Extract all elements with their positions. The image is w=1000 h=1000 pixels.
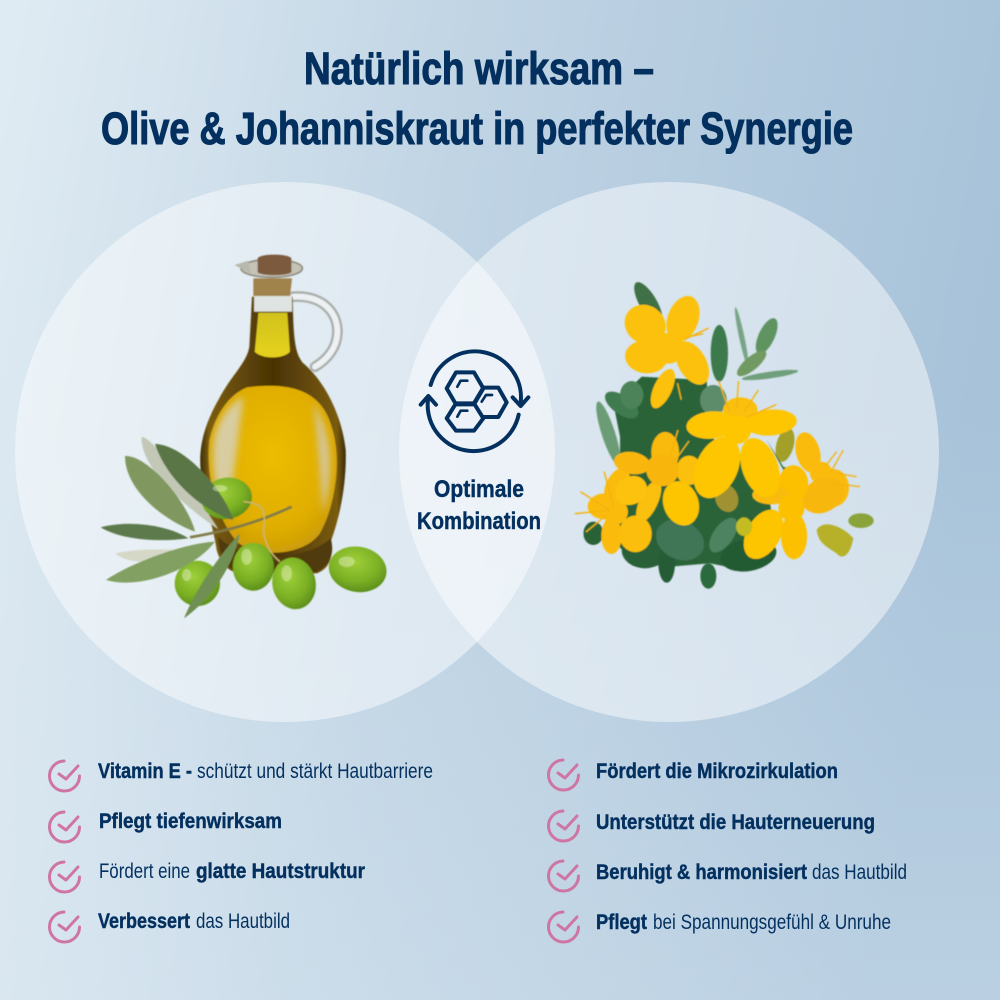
main oil [209,386,337,553]
item: glatte Hautstruktur [50,859,366,892]
flower 3 [610,430,705,531]
flower 4 [575,463,652,554]
rim [241,259,302,277]
item: Pflegt: bei Spannungsgefühl & Unruhe [653,910,891,934]
oil highlights [213,397,330,513]
item: Beruhigt [549,860,907,891]
item: Pflegt [549,910,891,942]
flower 2 [684,381,798,506]
item: Hauterneuerung [549,810,875,841]
panel: overlapping circles [15,182,939,722]
olives front [175,561,220,606]
item: Verbessert: Verbessert [98,909,190,933]
title: Natürlich wirksam – [304,43,654,94]
flower 1 [617,291,716,412]
item: Mikrozirkulation [549,759,838,790]
item: Vitamin E [50,759,433,791]
handle [293,297,337,367]
leaves back [142,437,218,529]
item: Mikrozirkulation: Fördert die Mikrozirkulation [596,759,838,783]
item: Beruhigt: das Hautbild [812,860,907,884]
label: optimale Kombination: Optimale [434,476,524,503]
centre buds [711,481,752,536]
buds [767,426,874,556]
bottle body [200,297,346,573]
title [101,43,853,154]
leaves front [106,542,215,583]
item: Pflegt tiefenwirksam [50,809,282,842]
item: Vitamin E: Vitamin E - [98,759,192,783]
base [218,537,332,572]
label: optimale Kombination [417,476,541,535]
olive behind [198,474,255,523]
item: glatte Hautstruktur: glatte Hautstruktur [196,859,366,883]
label: optimale Kombination: Kombination [417,508,541,535]
item: Beruhigt: Beruhigt & harmonisiert [596,860,807,884]
illustration: olive oil bottle with olives [101,255,390,618]
illustration: St. John's wort flowers [575,278,874,589]
olive highlights [182,485,355,581]
list: St. John's wort benefits [549,759,907,942]
flower 5 [735,465,851,566]
list: olive benefits [50,759,433,942]
dark leaf [155,444,233,520]
flower 6 [791,429,849,507]
item: Pflegt tiefenwirksam: Pflegt tiefenwirksam [99,809,282,833]
stem [190,507,292,537]
cork [258,255,291,275]
item: Pflegt: Pflegt [596,910,647,934]
bottle neck glass [254,295,292,312]
icon: hexagon cycle [421,351,528,451]
cork wrap [253,278,292,296]
stamens right [825,450,860,487]
item: Vitamin E: schützt und stärkt Hautbarriere [197,759,433,783]
oil in neck [255,313,290,357]
item: Verbessert: das Hautbild [196,909,290,933]
item: Verbessert [50,909,290,942]
item: Hauterneuerung: Unterstützt die Hauterneuerung [596,810,875,834]
item: glatte Hautstruktur: Fördert eine [99,859,190,883]
foliage [583,278,799,589]
